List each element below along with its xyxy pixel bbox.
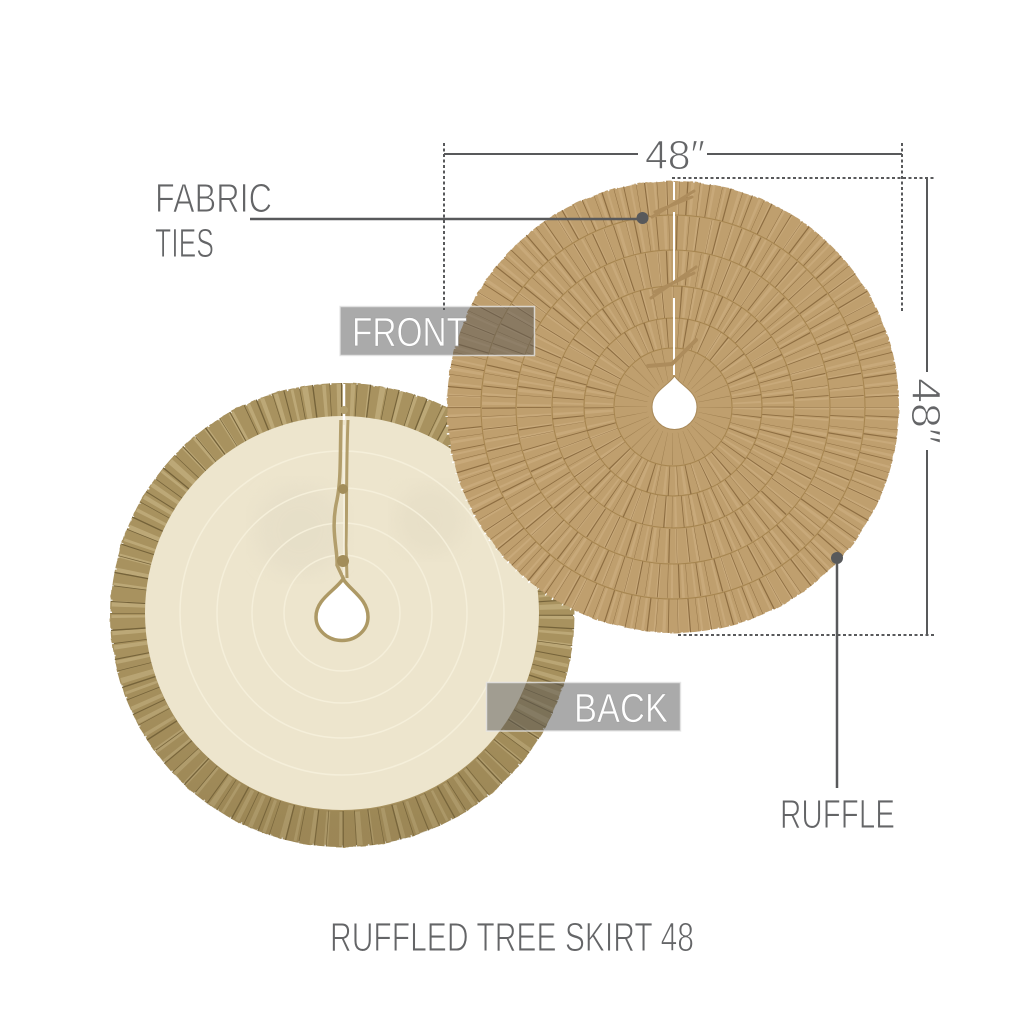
front centre hole <box>652 376 697 430</box>
callout: ruffle <box>780 552 895 837</box>
callout: fabric ties: TIES <box>155 220 214 266</box>
callout: fabric ties: FABRIC <box>155 175 272 221</box>
back tree skirt <box>110 383 574 847</box>
width dimension 48 inches: 48″ <box>645 132 705 178</box>
front tree skirt <box>446 180 900 634</box>
callout: fabric ties <box>155 175 648 266</box>
height dimension 48 inches <box>672 178 949 635</box>
BACK label: BACK <box>574 685 668 731</box>
width dimension 48 inches <box>444 132 902 313</box>
front ruffle rings <box>446 180 900 634</box>
FRONT label <box>340 306 534 356</box>
callout: ruffle: RUFFLE <box>780 791 895 837</box>
back ruffle <box>110 383 574 847</box>
back slit and ties <box>334 384 349 580</box>
front slit <box>673 182 675 375</box>
title: RUFFLED TREE SKIRT 48 <box>330 914 694 960</box>
BACK label <box>486 682 680 731</box>
back centre hole <box>316 579 368 640</box>
fabric tie bows <box>648 191 696 366</box>
height dimension 48 inches: 48″ <box>903 378 949 444</box>
FRONT label: FRONT <box>352 309 467 355</box>
back lining <box>145 416 539 810</box>
